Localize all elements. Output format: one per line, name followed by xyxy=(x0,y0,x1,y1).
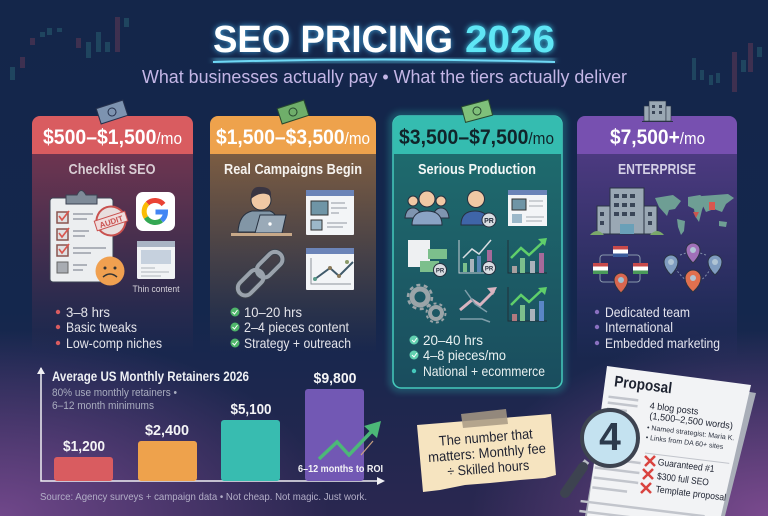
list: Basic tweaks xyxy=(66,319,137,335)
icon: magnifier: 4 xyxy=(599,416,621,459)
icon: world map xyxy=(655,194,734,235)
chart title: Average US Monthly Retainers 2026 xyxy=(52,369,249,384)
icon: building small xyxy=(642,101,673,122)
chart subtitle xyxy=(52,387,177,412)
proposal document: (1,500–2,500 words) xyxy=(649,411,733,432)
icon grid xyxy=(405,190,547,322)
panel: Real Campaigns Begin xyxy=(210,100,376,352)
proposal document: Guaranteed #1 xyxy=(657,457,715,475)
list xyxy=(230,304,351,351)
panel: Checklist SEO xyxy=(32,100,193,352)
price: $3,500–$7,500/mo xyxy=(399,125,554,149)
bar values: $5,100 xyxy=(230,401,272,418)
list: International xyxy=(605,319,673,335)
list: 3–8 hrs xyxy=(66,304,110,320)
tier name: Real Campaigns Begin xyxy=(224,162,362,178)
title: SEO PRICING xyxy=(213,19,453,61)
list: 10–20 hrs xyxy=(244,304,302,320)
icon: line chart page xyxy=(306,248,354,290)
axes xyxy=(41,368,381,481)
bar chart: retainers xyxy=(37,367,385,485)
icon: cash xyxy=(96,100,128,124)
icon: chain link xyxy=(235,249,286,299)
price: $500–$1,500/mo xyxy=(43,125,182,149)
list xyxy=(595,304,720,351)
list: 4–8 pieces/mo xyxy=(423,347,506,363)
panel: Enterprise xyxy=(577,101,737,360)
source note: Source: Agency surveys + campaign data • Not cheap. Not magic. Just work. xyxy=(40,491,367,503)
proposal document: Template proposal xyxy=(655,484,727,504)
icon: content page xyxy=(306,190,354,235)
list: 20–40 hrs xyxy=(423,332,483,348)
icon: cash xyxy=(277,100,309,124)
icon: person at laptop xyxy=(231,187,292,236)
ROI label: 6–12 months to ROI xyxy=(298,463,383,475)
list: Low-comp niches xyxy=(66,335,162,351)
callout: note: ÷ Skilled hours xyxy=(447,457,530,479)
icon: magnifier xyxy=(565,410,638,493)
bar values: $2,400 xyxy=(145,422,189,439)
panel: Serious Production xyxy=(388,100,567,393)
price: $1,500–$3,500/mo xyxy=(216,125,370,149)
proposal document xyxy=(579,366,756,516)
callout: note: The number that xyxy=(438,425,533,449)
list: Dedicated team xyxy=(605,304,690,320)
proposal document: 4 blog posts xyxy=(649,401,699,418)
callout: note xyxy=(417,409,556,492)
label: thin content: Thin content xyxy=(132,284,180,295)
icon: office building xyxy=(590,188,664,235)
tier name: Checklist SEO xyxy=(68,162,156,178)
icon: flags network xyxy=(593,246,648,293)
proposal document: • Named strategist: Maria K. xyxy=(647,425,735,442)
proposal document: Proposal xyxy=(613,373,673,397)
bars xyxy=(54,457,113,481)
icon: cash xyxy=(461,100,493,122)
bar values xyxy=(63,370,356,455)
callout: note: matters: Monthly fee xyxy=(428,440,547,465)
list: Strategy + outreach xyxy=(244,335,351,351)
icon grid: PR xyxy=(436,268,445,274)
list: Embedded marketing xyxy=(605,335,720,351)
price: $7,500+/mo xyxy=(610,125,705,149)
tier name: Serious Production xyxy=(418,162,536,178)
proposal document: • Links from DA 60+ sites xyxy=(645,435,724,451)
icon: location pins xyxy=(664,243,722,292)
proposal document: $300 full SEO xyxy=(656,471,709,489)
tier name: ENTERPRISE xyxy=(618,162,696,178)
subtitle: What businesses actually pay • What the tiers actually deliver xyxy=(142,66,627,87)
chart subtitle: 6–12 month minimums xyxy=(52,400,154,412)
icon: clipboard xyxy=(50,190,131,286)
bar values: $1,200 xyxy=(63,438,105,455)
icon: red crosses xyxy=(641,456,655,493)
list xyxy=(56,304,162,351)
list xyxy=(410,332,545,379)
bar values: $9,800 xyxy=(314,370,356,387)
list: National + ecommerce xyxy=(423,363,545,379)
icon: clipboard: AUDIT xyxy=(98,214,124,230)
list: 2–4 pieces content xyxy=(244,319,349,335)
icon grid: PR xyxy=(484,218,494,225)
arrow: growth xyxy=(319,421,381,459)
icon: thin content page xyxy=(137,241,175,279)
icon: sad face xyxy=(96,256,124,286)
chart subtitle: 80% use monthly retainers • xyxy=(52,387,177,399)
icon grid: PR xyxy=(485,266,494,272)
title: 2026 xyxy=(465,19,555,61)
icon: Google xyxy=(136,192,175,231)
